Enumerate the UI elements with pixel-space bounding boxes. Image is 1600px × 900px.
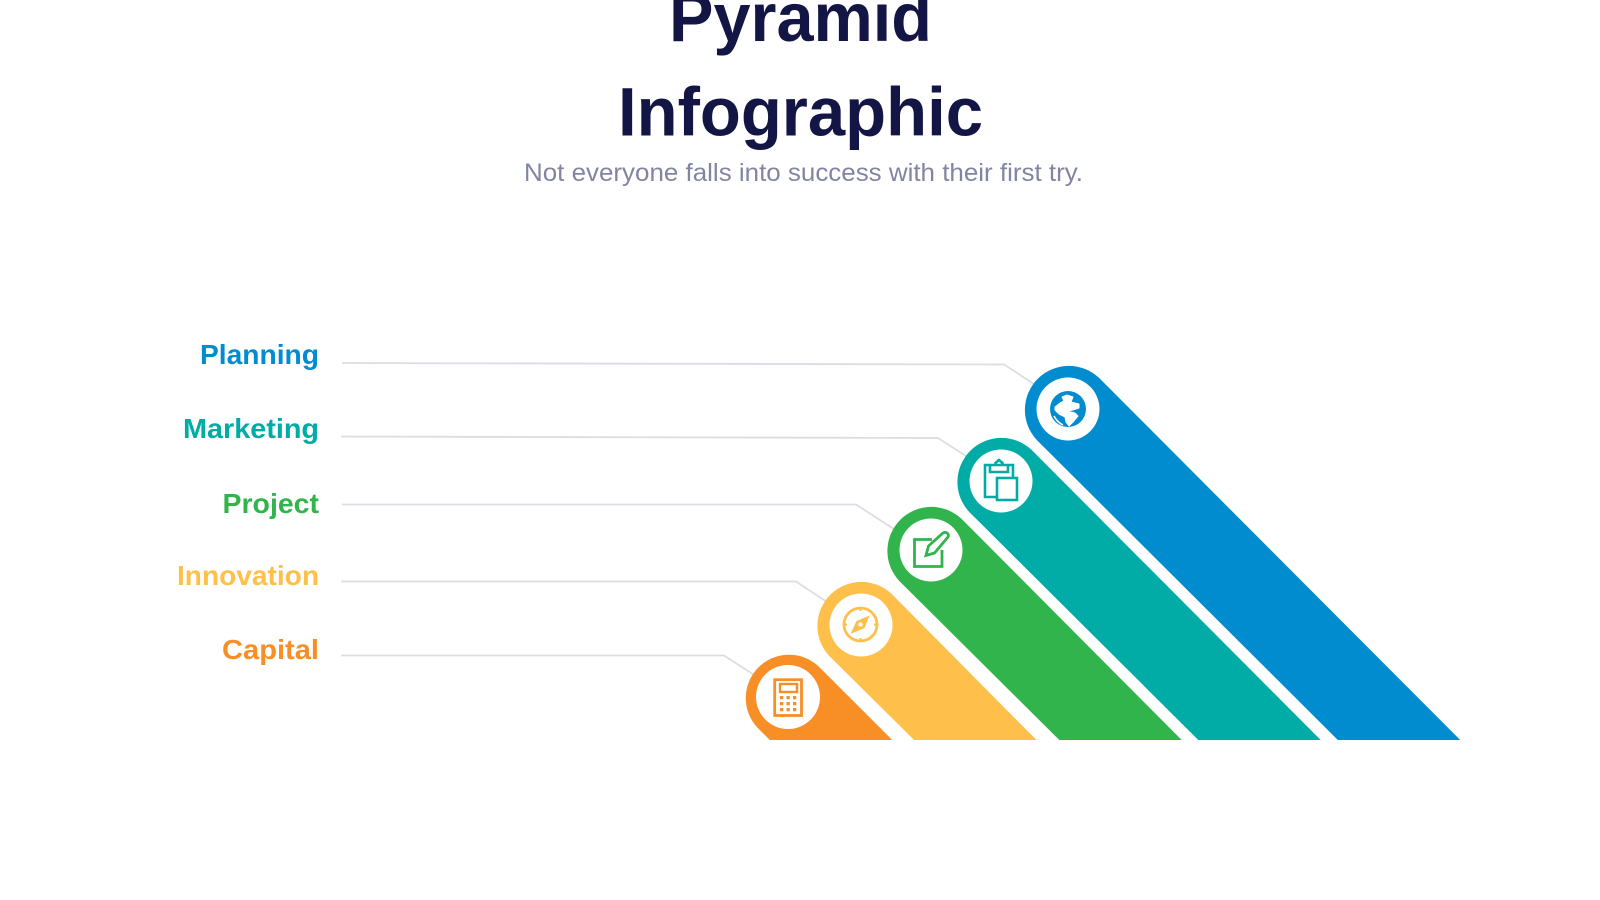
label: Marketing: Marketing [183, 413, 319, 444]
bar: Capital [746, 655, 892, 740]
icon: clipboard [985, 460, 1017, 500]
bar: Marketing [957, 438, 1321, 740]
title: Infographic [618, 74, 983, 150]
bar: Innovation [817, 582, 1036, 740]
icon: calculator [775, 680, 802, 716]
icon: edit pencil [914, 532, 948, 566]
label: Planning: Planning [200, 339, 319, 370]
label: Project: Project [222, 488, 319, 519]
bar: Project [887, 507, 1182, 740]
icon: compass [844, 608, 877, 641]
label: Capital: Capital [222, 634, 319, 665]
icon: globe [1050, 391, 1086, 427]
connector lines [341, 363, 1040, 680]
bar: Planning [1025, 366, 1460, 740]
subtitle: Not everyone falls into success with their first try. [524, 159, 1083, 187]
title [618, 0, 983, 150]
label: Innovation: Innovation [177, 560, 319, 591]
